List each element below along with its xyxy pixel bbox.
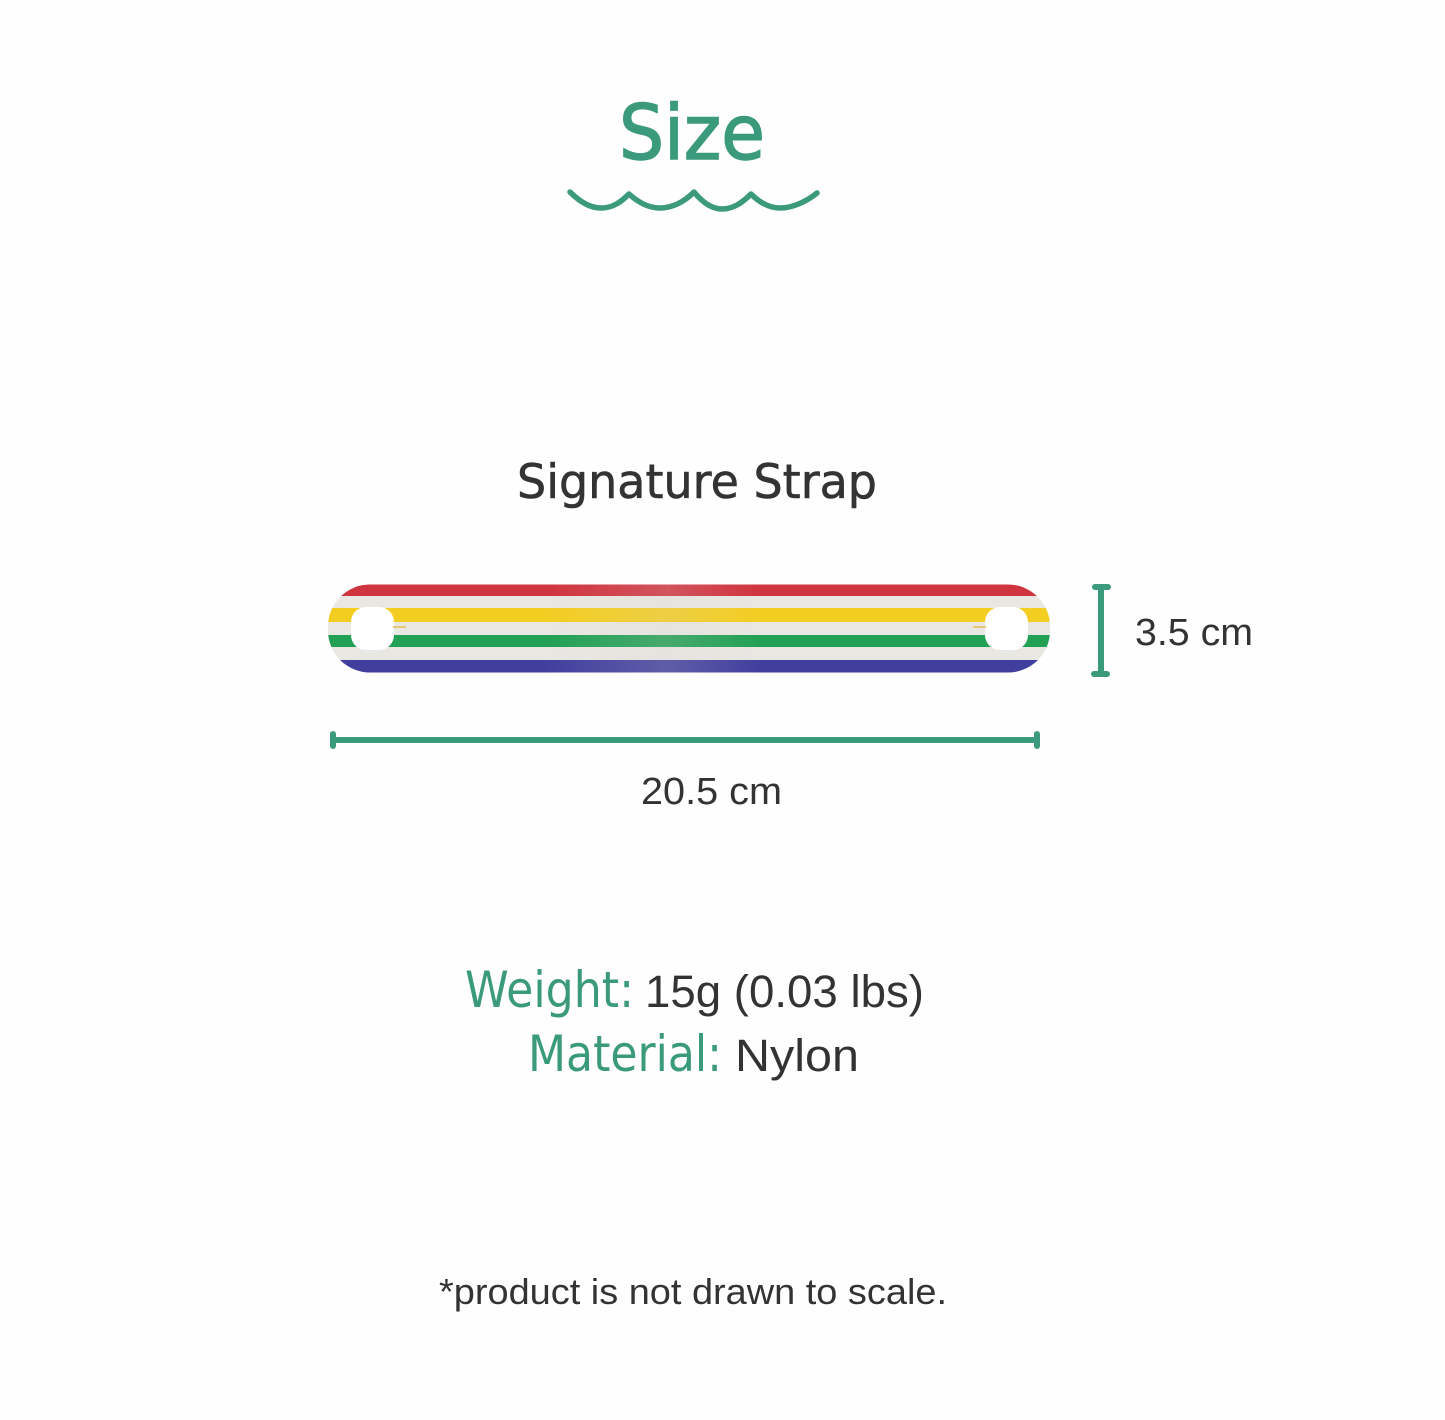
width label: 20.5 cm: [641, 771, 782, 813]
height dimension bracket: [1094, 587, 1108, 674]
rainbow strap: [328, 584, 1050, 673]
weight line: Weight:: [465, 961, 634, 1019]
material line: Material:: [528, 1025, 722, 1083]
weight line: [465, 961, 924, 1019]
right strap hole: [985, 607, 1028, 650]
height label: 3.5 cm: [1135, 612, 1253, 654]
width dimension bracket: [333, 734, 1037, 746]
left slit: [393, 626, 406, 628]
weight line: 15g (0.03 lbs): [645, 966, 924, 1017]
left strap hole: [351, 607, 394, 650]
title: Size: [619, 88, 765, 177]
product name heading: Signature Strap: [517, 455, 877, 510]
footnote: *product is not drawn to scale.: [439, 1271, 947, 1312]
right slit: [973, 626, 986, 628]
title wave underline: [570, 192, 817, 209]
material line: Nylon: [735, 1030, 859, 1081]
material line: [528, 1025, 859, 1083]
